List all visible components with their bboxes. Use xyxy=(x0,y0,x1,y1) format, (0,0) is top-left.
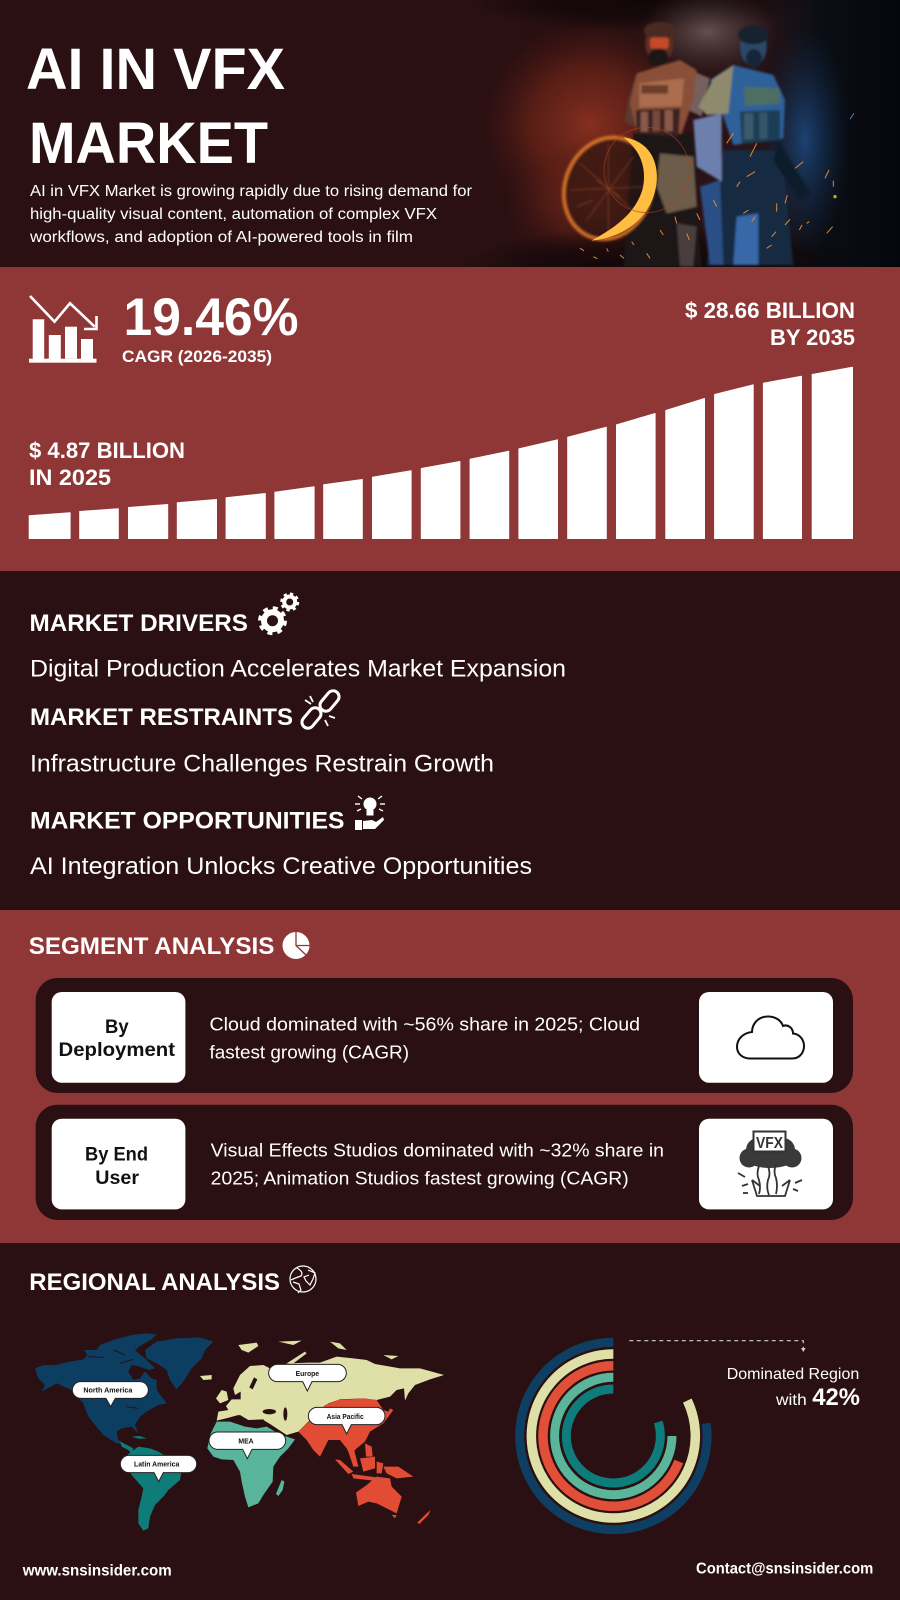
hero artwork: two soldiers with fiery ring xyxy=(440,0,900,309)
label: by deployment: Deployment xyxy=(58,1040,176,1061)
radial chart: regional share xyxy=(520,1342,707,1530)
hero description: high-quality visual content, automation of complex VFX xyxy=(30,206,438,223)
2025 value xyxy=(29,438,185,490)
callout: Asia Pacific xyxy=(308,1407,385,1434)
heading: market drivers: MARKET DRIVERS xyxy=(30,610,248,637)
label: by end user xyxy=(85,1145,148,1189)
callout: MEA xyxy=(209,1432,286,1459)
heading: market restraints: MARKET RESTRAINTS xyxy=(30,704,293,731)
icon: broken link xyxy=(300,688,341,731)
callout: Asia Pacific: Asia Pacific xyxy=(327,1414,364,1421)
opportunity text: AI Integration Unlocks Creative Opportunities xyxy=(30,853,532,880)
heading: segment analysis: SEGMENT ANALYSIS xyxy=(29,933,274,960)
icon: cloud xyxy=(737,1016,804,1058)
callout: Latin America: Latin America xyxy=(134,1462,179,1469)
blue soldier xyxy=(693,26,810,265)
title xyxy=(26,37,285,176)
sparks xyxy=(580,113,854,259)
map region: Latin America xyxy=(120,1436,182,1531)
icon: gears xyxy=(260,594,298,633)
icon: idea bulb in hand xyxy=(355,796,385,830)
fire ring xyxy=(550,125,689,252)
callout: MEA: MEA xyxy=(238,1438,254,1445)
deployment description: fastest growing (CAGR) xyxy=(210,1042,409,1063)
CAGR value: 19.46% xyxy=(124,288,298,347)
segment card: by deployment xyxy=(36,978,853,1093)
CAGR label: CAGR (2026-2035) xyxy=(122,348,272,366)
deployment description: Cloud dominated with ~56% share in 2025; Cloud xyxy=(210,1014,640,1035)
segment card: by end user xyxy=(36,1105,853,1220)
footer: website: www.snsinsider.com xyxy=(22,1563,172,1580)
end user description: Visual Effects Studios dominated with ~32% share in xyxy=(211,1140,664,1161)
end user description xyxy=(211,1140,664,1188)
map region: North America xyxy=(35,1333,213,1444)
label: by deployment xyxy=(58,1017,176,1061)
title: AI IN VFX xyxy=(26,37,285,102)
bar chart: market growth xyxy=(29,367,852,538)
callout: dominated region: 42% xyxy=(812,1384,860,1411)
hero description: AI in VFX Market is growing rapidly due to rising demand for xyxy=(30,183,472,200)
icon: VFX explosion: VFX xyxy=(756,1135,783,1152)
heading: regional analysis: REGIONAL ANALYSIS xyxy=(29,1269,280,1296)
panel: drivers, restraints, opportunities xyxy=(30,594,566,880)
2035 value: $ 28.66 BILLION xyxy=(685,298,855,323)
icon: globe xyxy=(290,1266,316,1293)
panel: segment analysis xyxy=(0,910,900,1580)
map region: Europe xyxy=(200,1341,444,1435)
callout: Latin America xyxy=(120,1455,197,1482)
label: by end user: By End xyxy=(85,1145,148,1166)
callout: dominated region: with xyxy=(775,1392,807,1409)
2035 value xyxy=(685,298,855,350)
icon: pie chart xyxy=(282,932,310,959)
hero description: workflows, and adoption of AI-powered tools in film xyxy=(29,229,413,246)
2025 value: $ 4.87 BILLION xyxy=(29,438,185,463)
map region: Asia Pacific xyxy=(298,1398,431,1524)
red soldier xyxy=(623,22,710,267)
world map xyxy=(35,1333,444,1531)
2025 value: IN 2025 xyxy=(29,465,111,490)
callout: Europe xyxy=(269,1364,346,1391)
callout: Europe: Europe xyxy=(296,1371,319,1378)
label: by deployment: By xyxy=(105,1017,129,1038)
panel: hero header xyxy=(26,0,900,309)
callout: North America xyxy=(72,1382,148,1407)
callout: North America: North America xyxy=(83,1388,132,1395)
restraint text: Infrastructure Challenges Restrain Growth xyxy=(30,751,494,778)
panel: regional analysis xyxy=(29,1266,860,1531)
icon: falling chart xyxy=(29,296,96,363)
driver text: Digital Production Accelerates Market Expansion xyxy=(30,656,566,683)
icon: VFX explosion xyxy=(738,1132,802,1196)
callout: dominated region: Dominated Region xyxy=(727,1366,859,1383)
footer: contact email: Contact@snsinsider.com xyxy=(696,1560,873,1577)
label: by end user: User xyxy=(95,1168,140,1189)
deployment description xyxy=(210,1014,640,1063)
hero description xyxy=(29,183,472,246)
arrow: dashed leader to dominated region xyxy=(629,1341,806,1352)
heading: market opportunities: MARKET OPPORTUNITIES xyxy=(30,808,344,835)
map region: Middle East and Africa xyxy=(207,1422,295,1507)
title: MARKET xyxy=(29,111,268,176)
2035 value: BY 2035 xyxy=(770,325,855,350)
panel: market size xyxy=(0,267,900,571)
end user description: 2025; Animation Studios fastest growing (CAGR) xyxy=(211,1167,629,1188)
callout: dominated region xyxy=(727,1366,860,1411)
